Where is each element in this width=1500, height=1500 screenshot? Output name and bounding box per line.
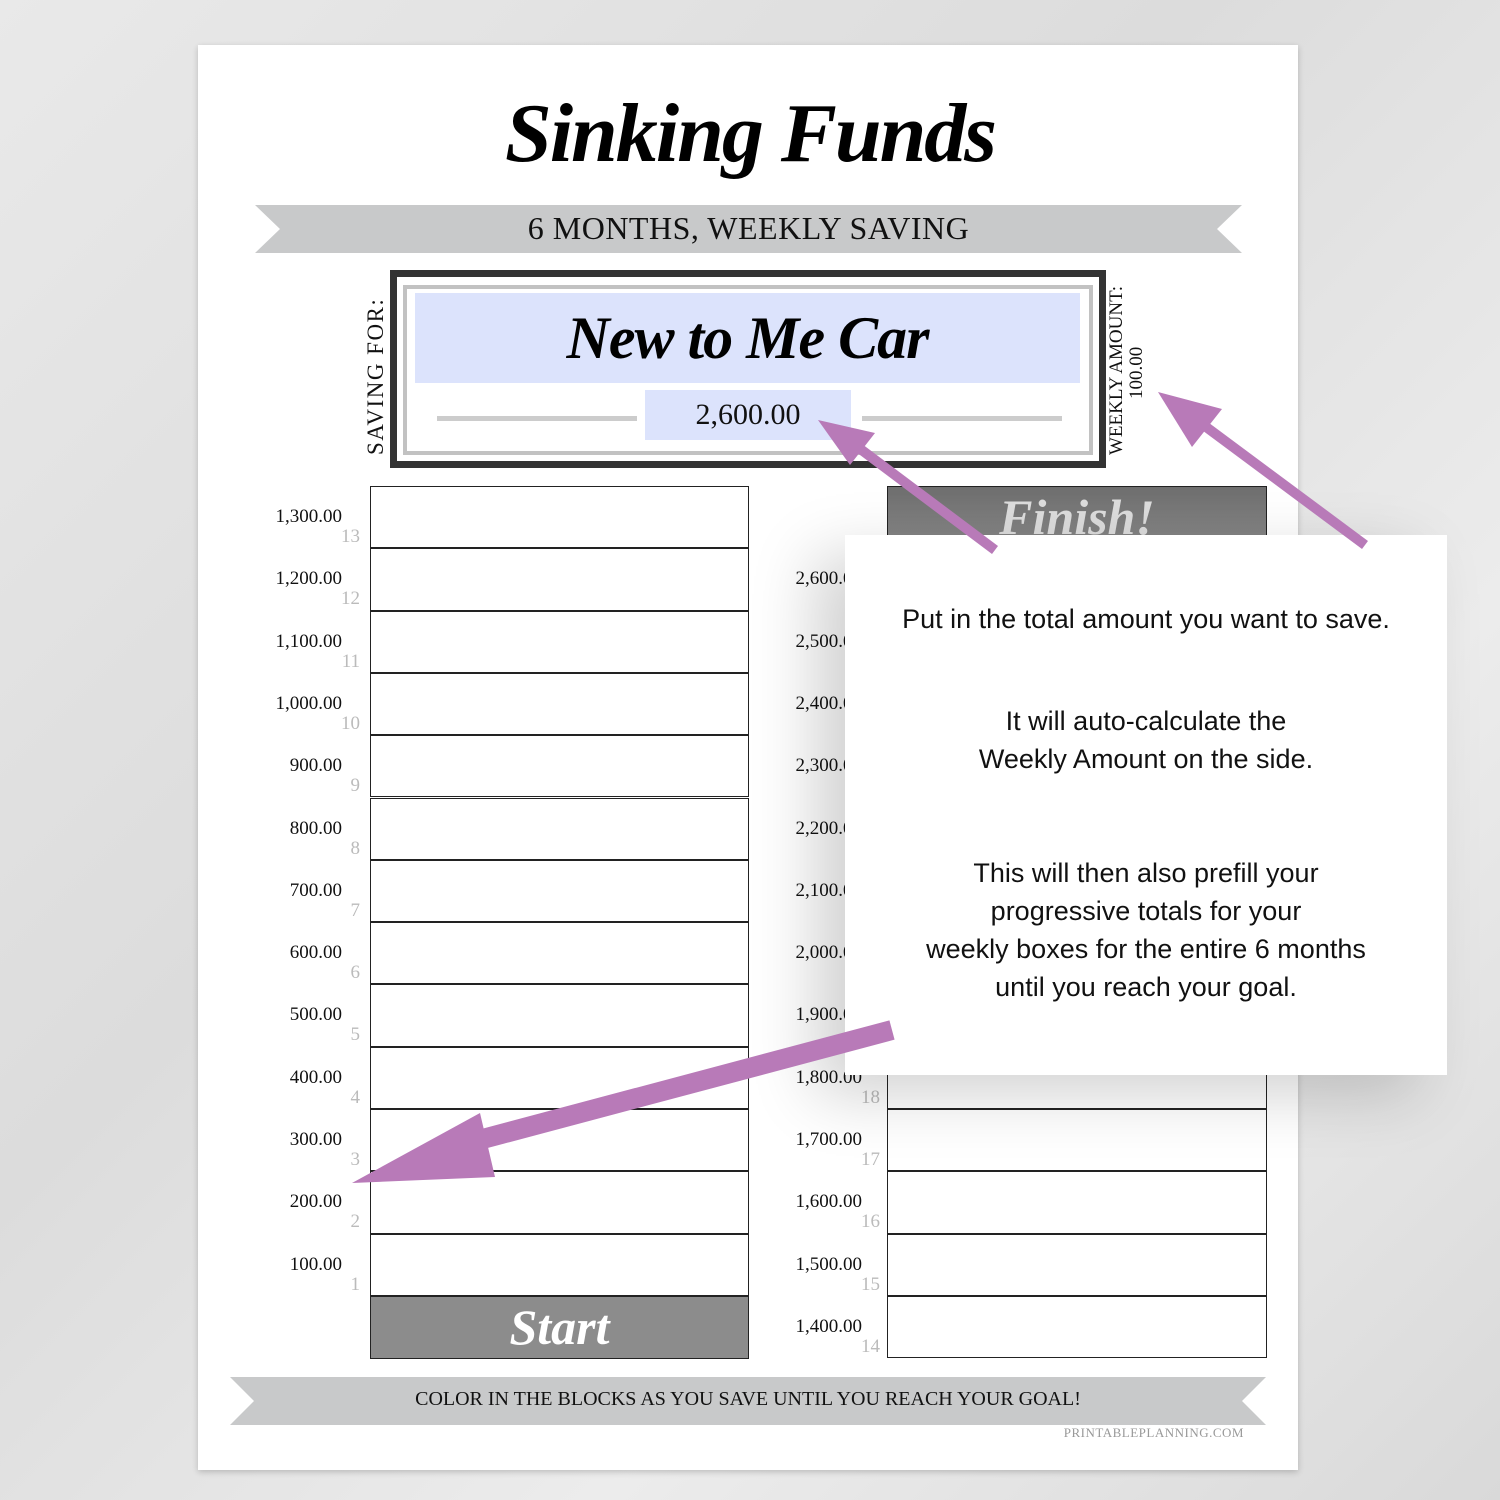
callout text 1: Put in the total amount you want to save. <box>902 604 1390 634</box>
goal name <box>415 293 1080 383</box>
left column: 11 <box>342 651 360 672</box>
left column: 200.00 <box>290 1191 342 1212</box>
right column: 20 <box>861 962 880 983</box>
callout text 3: This will then also prefill your <box>973 858 1319 888</box>
left column: 12 <box>341 588 360 609</box>
left column: 7 <box>350 900 360 921</box>
callout text 2 <box>979 706 1313 774</box>
callout <box>845 535 1447 1075</box>
left column: 800.00 <box>290 818 342 838</box>
right column: 2,000.00 <box>796 942 862 963</box>
right column: 26 <box>861 588 880 609</box>
callout text 3 <box>926 858 1366 1002</box>
right column: 2,300.00 <box>796 755 862 776</box>
finish block <box>887 486 1267 549</box>
left column: 500.00 <box>290 1004 342 1025</box>
callout text 2: Weekly Amount on the side. <box>979 744 1313 774</box>
right column: 24 <box>861 713 880 734</box>
right column: 15 <box>861 1274 880 1295</box>
label: weekly amount: WEEKLY AMOUNT: <box>1106 286 1127 455</box>
label: saving for: SAVING FOR: <box>363 298 388 455</box>
left column: 1 <box>350 1274 360 1295</box>
left column: 9 <box>350 775 360 796</box>
right column: 1,800.00 <box>796 1067 862 1088</box>
left column: 300.00 <box>290 1129 342 1150</box>
left column: 100.00 <box>290 1254 342 1275</box>
arrow: to goal amount <box>818 420 995 550</box>
start block <box>370 1296 749 1359</box>
left column: 400.00 <box>290 1067 342 1088</box>
left column: 1,200.00 <box>276 568 342 589</box>
credit: PRINTABLEPLANNING.COM <box>1064 1425 1244 1440</box>
right column: 16 <box>861 1211 880 1232</box>
right column: 17 <box>861 1149 880 1170</box>
callout text 2: It will auto-calculate the <box>1006 706 1286 736</box>
right column: 23 <box>861 775 880 796</box>
right column: 22 <box>861 838 880 858</box>
left column: 1,000.00 <box>276 693 342 714</box>
left column: 1,100.00 <box>276 631 342 652</box>
right column: 19 <box>861 1024 880 1045</box>
left column: 10 <box>341 713 360 734</box>
left column: 600.00 <box>290 942 342 963</box>
left column: 4 <box>350 1087 360 1108</box>
right column: 18 <box>861 1087 880 1108</box>
page sheet <box>198 45 1298 1470</box>
finish block: Finish! <box>999 489 1155 545</box>
callout text 3: until you reach your goal. <box>995 972 1297 1002</box>
right column: 2,600.00 <box>796 568 862 589</box>
left column: 5 <box>350 1024 360 1045</box>
right column: 2,100.00 <box>796 880 862 901</box>
left column: 3 <box>350 1149 360 1170</box>
left column: 6 <box>350 962 360 983</box>
right column: 2,200.00 <box>796 818 862 838</box>
right column: 1,900.00 <box>796 1004 862 1025</box>
callout text 3: weekly boxes for the entire 6 months <box>926 934 1366 964</box>
left column: 1,300.00 <box>276 506 342 527</box>
banner: subtitle <box>255 205 1242 253</box>
left column: 8 <box>350 838 360 858</box>
left column: 900.00 <box>290 755 342 776</box>
right column: 25 <box>861 651 880 672</box>
label: weekly amount: 100.00 <box>1126 347 1147 399</box>
goal box <box>390 270 1106 468</box>
callout text 3: progressive totals for your <box>991 896 1301 926</box>
left column: 13 <box>341 526 360 547</box>
title: Sinking Funds <box>505 87 995 180</box>
arrow: to weekly boxes <box>352 1030 892 1183</box>
right column: 2,500.00 <box>796 631 862 652</box>
banner: footer instruction <box>230 1377 1266 1425</box>
goal amount: 2,600.00 <box>696 398 800 431</box>
left column: 700.00 <box>290 880 342 901</box>
right column: 1,400.00 <box>796 1316 862 1337</box>
right column: 21 <box>861 900 880 921</box>
start block: Start <box>509 1299 610 1355</box>
left column: 2 <box>350 1211 360 1232</box>
goal amount <box>645 390 851 440</box>
right column <box>796 486 1267 1358</box>
right column: 1,500.00 <box>796 1254 862 1275</box>
label: weekly amount <box>1106 286 1147 455</box>
banner: footer instruction: COLOR IN THE BLOCKS AS YOU SAVE UNTIL YOU REACH YOUR GOAL! <box>415 1388 1081 1410</box>
right column: 2,400.00 <box>796 693 862 714</box>
goal name: New to Me Car <box>566 305 928 371</box>
arrow: to weekly amount <box>1158 392 1365 545</box>
right column: 1,600.00 <box>796 1191 862 1212</box>
left column <box>276 486 749 1359</box>
banner: subtitle: 6 MONTHS, WEEKLY SAVING <box>528 210 969 246</box>
right column: 1,700.00 <box>796 1129 862 1150</box>
right column: 14 <box>861 1336 880 1357</box>
